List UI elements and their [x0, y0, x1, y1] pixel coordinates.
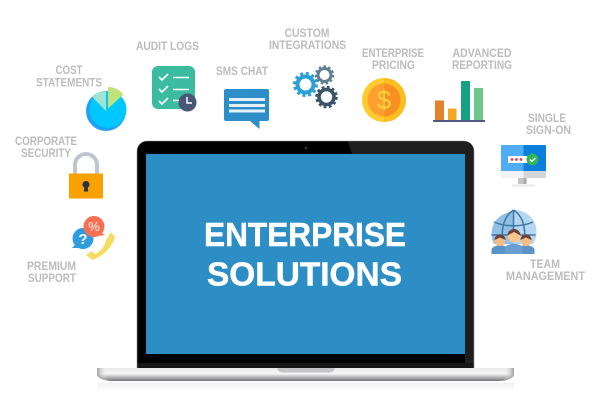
icon: pie chart [86, 87, 126, 131]
label: advanced reporting [452, 46, 512, 72]
title: ENTERPRISE [204, 217, 406, 254]
laptop lid [137, 141, 474, 368]
icon: gears [294, 66, 336, 107]
laptop shadow [97, 382, 514, 392]
label: team management: TEAM [530, 257, 560, 271]
icon: padlock [69, 154, 103, 198]
label: single sign-on [526, 111, 571, 137]
icon: checklist with clock [152, 66, 196, 112]
label: audit logs: AUDIT LOGS [136, 39, 199, 53]
screen [146, 154, 465, 354]
icon: support phone and bubbles: % [88, 219, 100, 234]
label: advanced reporting: REPORTING [452, 58, 512, 72]
laptop notch [277, 368, 335, 372]
label: custom integrations [269, 26, 346, 52]
label: enterprise pricing: ENTERPRISE [362, 46, 424, 60]
icon: dollar coin: $ [377, 85, 392, 115]
title [204, 217, 406, 294]
icon: bar chart [433, 81, 485, 122]
label: cost statements: STATEMENTS [36, 76, 102, 90]
icon: dollar coin [362, 78, 406, 122]
person: left [492, 234, 508, 254]
label: custom integrations: CUSTOM [284, 26, 330, 40]
laptop base [97, 368, 514, 381]
label: cost statements [36, 63, 102, 90]
icon: team with globe [492, 210, 537, 254]
label: corporate security [15, 134, 77, 160]
webcam [305, 147, 307, 149]
label: corporate security: SECURITY [21, 146, 71, 160]
label: premium support: SUPPORT [28, 271, 77, 285]
icon: chat bubble [224, 89, 269, 129]
label: custom integrations: INTEGRATIONS [269, 38, 346, 52]
label: single sign-on: SINGLE [528, 111, 566, 125]
icon: monitor login [501, 145, 546, 186]
person: right [518, 234, 534, 254]
label: premium support [27, 259, 77, 285]
label: corporate security: CORPORATE [15, 134, 77, 148]
label: team management [506, 257, 586, 283]
icon: support phone and bubbles: ? [78, 231, 88, 248]
label: team management: MANAGEMENT [506, 269, 586, 283]
person: centre [505, 229, 523, 254]
laptop [97, 141, 514, 392]
title: SOLUTIONS [207, 256, 402, 294]
label: advanced reporting: ADVANCED [452, 46, 512, 60]
label: enterprise pricing: PRICING [372, 58, 415, 72]
label: premium support: PREMIUM [27, 259, 76, 273]
icon: support phone and bubbles [72, 216, 115, 260]
label: single sign-on: SIGN-ON [526, 123, 571, 137]
phone handset [86, 232, 115, 260]
label: sms chat: SMS CHAT [216, 64, 269, 78]
label: cost statements: COST [56, 63, 83, 77]
label: enterprise pricing [362, 46, 424, 72]
